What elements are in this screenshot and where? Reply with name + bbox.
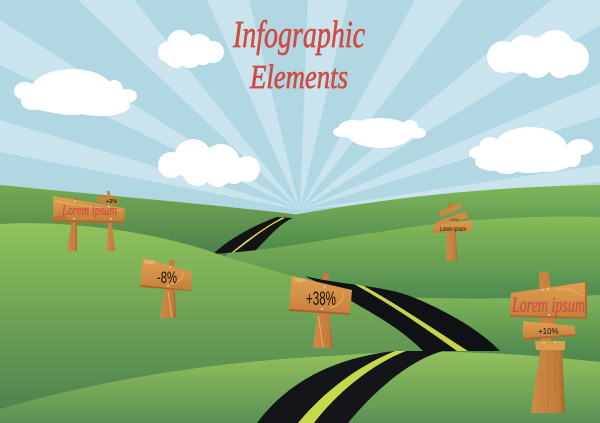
middle plank	[523, 321, 575, 340]
hill: back left	[0, 185, 300, 270]
value: -8%	[157, 268, 177, 287]
posts	[67, 191, 115, 251]
road: front section	[257, 351, 443, 423]
hill: large front left	[0, 223, 470, 423]
cloud: lower right	[469, 127, 593, 174]
title: Elements	[249, 59, 348, 96]
bottom plank: Lorem ipsum	[440, 226, 466, 233]
road: middle section	[305, 276, 500, 351]
plank	[140, 258, 192, 291]
plank	[289, 276, 352, 315]
sign: Lorem ipsum right	[510, 271, 587, 413]
middle plank: -10%	[449, 217, 459, 222]
sign: Lorem ipsum left	[53, 191, 125, 251]
hill: middle right	[227, 217, 600, 360]
top plank	[439, 203, 462, 217]
middle plank: +10%	[538, 327, 559, 336]
title: Infographic	[232, 14, 365, 56]
post	[531, 271, 565, 413]
cloud: top centre-left	[158, 30, 224, 68]
sign: small stacked right	[433, 203, 472, 261]
title	[232, 14, 365, 96]
cloud: large left	[14, 69, 137, 116]
hill: back right	[255, 185, 600, 300]
sign: +38%	[289, 273, 352, 348]
hill: foreground	[0, 352, 600, 423]
value: +38%	[306, 289, 336, 310]
road: far section	[213, 217, 293, 254]
sign: -8%	[140, 258, 192, 318]
cloud: top right	[487, 30, 589, 78]
large plank	[510, 282, 587, 319]
post	[313, 310, 333, 348]
cloud: centre	[333, 118, 426, 148]
large plank: Lorem ipsum	[61, 203, 117, 219]
post	[446, 230, 457, 261]
small plank: +2%	[106, 199, 117, 205]
small plank	[535, 341, 565, 350]
sunburst rays	[0, 0, 600, 210]
cloud: lower centre-left	[158, 139, 260, 187]
post	[160, 260, 176, 318]
hill: lower right band	[380, 295, 600, 370]
